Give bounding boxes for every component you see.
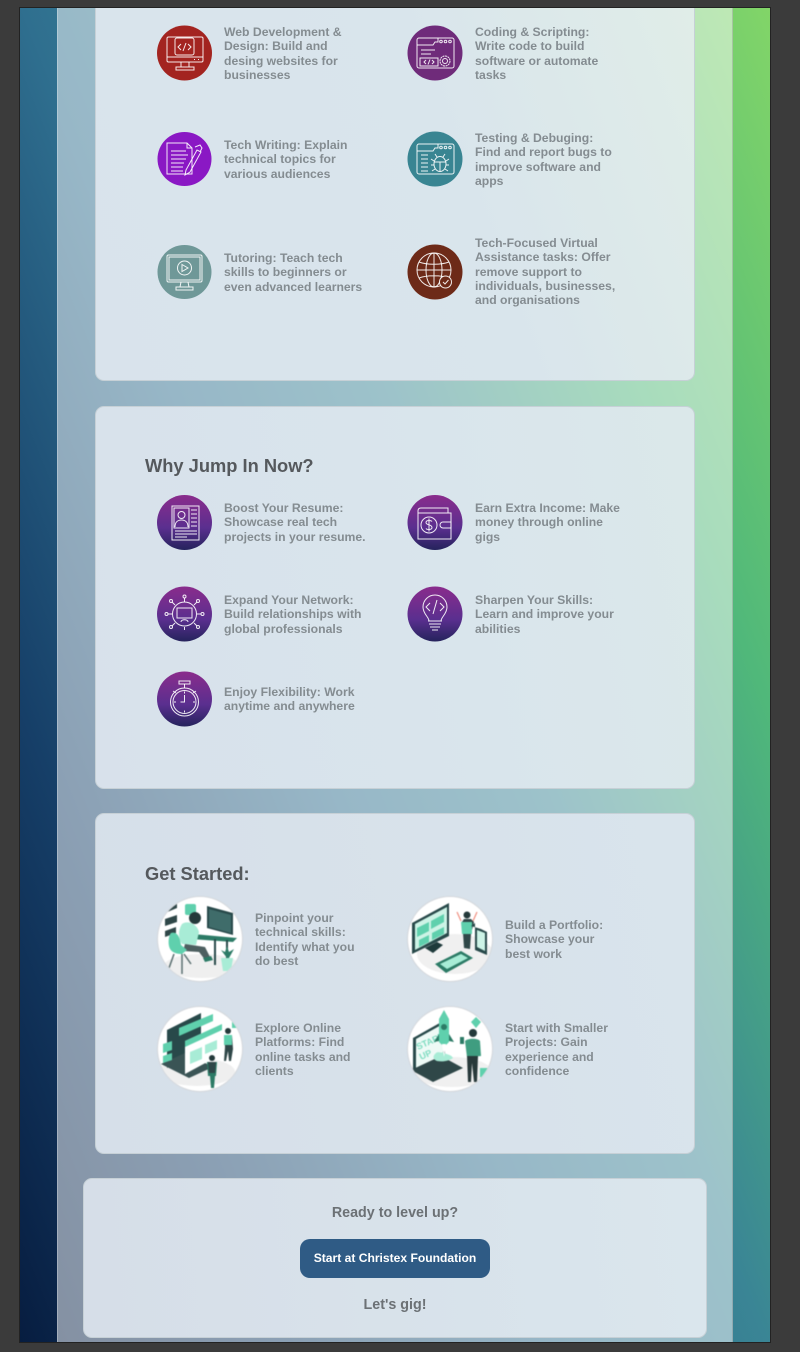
item: pinpoint technical skills — [158, 896, 355, 982]
text: start with smaller projects: Projects: Gain — [505, 1035, 588, 1049]
text: coding and scripting — [475, 25, 598, 82]
item: start with smaller projects — [408, 1006, 608, 1092]
text: start with smaller projects: Start with Smaller — [505, 1021, 608, 1035]
text: sharpen your skills — [475, 593, 614, 636]
panel: get started — [95, 813, 695, 1154]
text: web development: Design: Build and — [224, 39, 328, 53]
text: build a portfolio — [505, 918, 603, 961]
text: pinpoint technical skills: do best — [255, 954, 298, 968]
item: enjoy flexibility — [157, 672, 355, 726]
illustration: laptop with web pages — [158, 1006, 242, 1092]
text: explore online platforms: clients — [255, 1064, 294, 1078]
button: start at Christex Foundation: Start at Christex Foundation — [314, 1251, 476, 1265]
text: explore online platforms: online tasks and — [255, 1050, 350, 1064]
icon: resume — [157, 495, 212, 550]
text: web development: desing websites for — [224, 54, 338, 68]
item: explore online platforms — [158, 1006, 350, 1092]
text: sharpen your skills: Sharpen Your Skills: — [475, 593, 593, 607]
icon: network hub — [157, 586, 212, 642]
text: coding and scripting: software or automate — [475, 54, 598, 68]
text: virtual assistance: Tech-Focused Virtual — [475, 236, 598, 250]
icon: code window with gear — [408, 26, 462, 80]
illustration: rocket launching from laptop — [408, 1006, 492, 1092]
icon: wallet with dollar — [408, 495, 462, 550]
text: start with smaller projects: experience and — [505, 1050, 594, 1064]
text: let's gig: Let's gig! — [364, 1297, 426, 1313]
text: pinpoint technical skills: technical skills: — [255, 925, 346, 939]
text: virtual assistance: remove support to — [475, 265, 582, 279]
illustration: portfolio screens — [408, 896, 492, 982]
text: web development: Web Development & — [224, 25, 342, 39]
text: pinpoint technical skills: Pinpoint your — [255, 911, 334, 925]
icon: document with pen — [158, 132, 212, 186]
text: expand your network: global professionals — [224, 622, 343, 636]
text: coding and scripting: Coding & Scripting: — [475, 25, 589, 39]
text: virtual assistance: Assistance tasks: Offer — [475, 250, 610, 264]
text: start with smaller projects — [505, 1021, 608, 1078]
illustration: rocket launching from laptop: UP — [418, 1048, 433, 1062]
illustration: person at desk — [158, 896, 242, 982]
text: virtual assistance: individuals, businesses, — [475, 279, 615, 293]
illustration: rocket launching from laptop: START — [415, 1031, 446, 1052]
text: tutoring — [224, 251, 362, 294]
icon: stopwatch — [157, 672, 212, 726]
text: earn extra income: money through online — [475, 515, 603, 529]
text: earn extra income — [475, 501, 620, 544]
item: expand your network — [157, 586, 361, 642]
item: tutoring — [158, 245, 362, 299]
text: tech writing — [224, 138, 347, 181]
text: earn extra income: Earn Extra Income: Make — [475, 501, 620, 515]
panel: ways to earn — [95, 8, 695, 381]
icon: window with bug — [408, 132, 462, 186]
text: build a portfolio: Showcase your — [505, 932, 594, 946]
text: explore online platforms: Explore Online — [255, 1021, 341, 1035]
panel: call to action — [83, 1178, 707, 1338]
text: earn extra income: gigs — [475, 530, 500, 544]
text: expand your network: Expand Your Network: — [224, 593, 354, 607]
text: sharpen your skills: Learn and improve your — [475, 607, 614, 621]
icon: light bulb with code — [408, 586, 462, 642]
text: start with smaller projects: confidence — [505, 1064, 569, 1078]
text: virtual assistance — [475, 236, 615, 307]
text: coding and scripting: Write code to build — [475, 39, 584, 53]
text: virtual assistance: and organisations — [475, 293, 580, 307]
text: testing and debugging: apps — [475, 174, 503, 188]
panel: why jump in now — [95, 406, 695, 789]
text: boost your resume: projects in your resume. — [224, 530, 366, 544]
item: web development — [157, 25, 342, 82]
button: start at Christex Foundation — [300, 1239, 490, 1278]
text: build a portfolio: best work — [505, 947, 562, 961]
item: earn extra income — [408, 495, 620, 550]
text: boost your resume: Showcase real tech — [224, 515, 337, 529]
text: testing and debugging: improve software and — [475, 160, 601, 174]
text: tutoring: Tutoring: Teach tech — [224, 251, 343, 265]
text: pinpoint technical skills — [255, 911, 355, 968]
item: build a portfolio — [408, 896, 603, 982]
heading: get started: Get Started: — [145, 863, 250, 884]
text: pinpoint technical skills: Identify what you — [255, 940, 355, 954]
text: enjoy flexibility — [224, 685, 355, 713]
item: tech writing — [158, 132, 347, 186]
text: web development: businesses — [224, 68, 290, 82]
item: coding and scripting — [408, 25, 598, 82]
item: virtual assistance — [408, 236, 615, 307]
icon: monitor with code — [157, 26, 212, 80]
item: testing and debugging — [408, 131, 612, 188]
item: sharpen your skills — [408, 586, 614, 642]
icon: monitor with play button — [158, 245, 212, 299]
text: tutoring: even advanced learners — [224, 280, 362, 294]
text: testing and debugging: Testing & Debuging: — [475, 131, 593, 145]
text: coding and scripting: tasks — [475, 68, 506, 82]
text: tech writing: various audiences — [224, 167, 330, 181]
text: boost your resume: Boost Your Resume: — [224, 501, 343, 515]
text: enjoy flexibility: anytime and anywhere — [224, 699, 355, 713]
text: web development — [224, 25, 342, 82]
item: boost your resume — [157, 495, 366, 550]
text: explore online platforms — [255, 1021, 350, 1078]
heading: why jump in now: Why Jump In Now? — [145, 455, 314, 476]
text: enjoy flexibility: Enjoy Flexibility: Work — [224, 685, 354, 699]
text: ready to level up: Ready to level up? — [332, 1205, 458, 1221]
text: sharpen your skills: abilities — [475, 622, 520, 636]
text: tutoring: skills to beginners or — [224, 265, 347, 279]
text: boost your resume — [224, 501, 366, 544]
icon: globe with check — [408, 244, 462, 300]
text: testing and debugging: Find and report bugs to — [475, 145, 612, 159]
text: explore online platforms: Platforms: Find — [255, 1035, 344, 1049]
text: tech writing: technical topics for — [224, 152, 336, 166]
text: expand your network — [224, 593, 361, 636]
text: tech writing: Tech Writing: Explain — [224, 138, 347, 152]
text: expand your network: Build relationships with — [224, 607, 361, 621]
text: testing and debugging — [475, 131, 612, 188]
text: build a portfolio: Build a Portfolio: — [505, 918, 603, 932]
